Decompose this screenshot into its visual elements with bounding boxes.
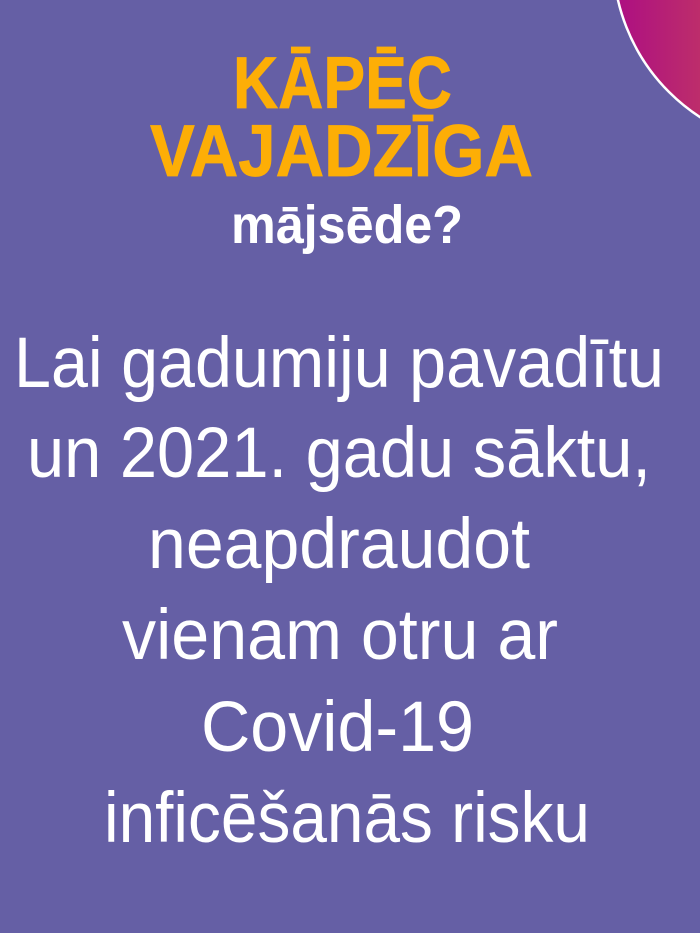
body line 5: Covid-19 (201, 688, 474, 767)
body line 3: neapdraudot (148, 505, 530, 584)
heading line 2: VAJADZĪGA (150, 111, 533, 192)
subheading: mājsēde? (231, 195, 463, 255)
corner circle (613, 0, 700, 148)
heading (150, 43, 533, 255)
body line 4: vienam otru ar (122, 596, 558, 675)
heading line 1: KĀPĒC (233, 43, 452, 124)
body line 6: inficēšanās risku (104, 779, 590, 858)
body line 1: Lai gadumiju pavadītu (14, 324, 664, 403)
body line 2: un 2021. gadu sāktu, (27, 414, 651, 493)
body text block (14, 324, 664, 858)
